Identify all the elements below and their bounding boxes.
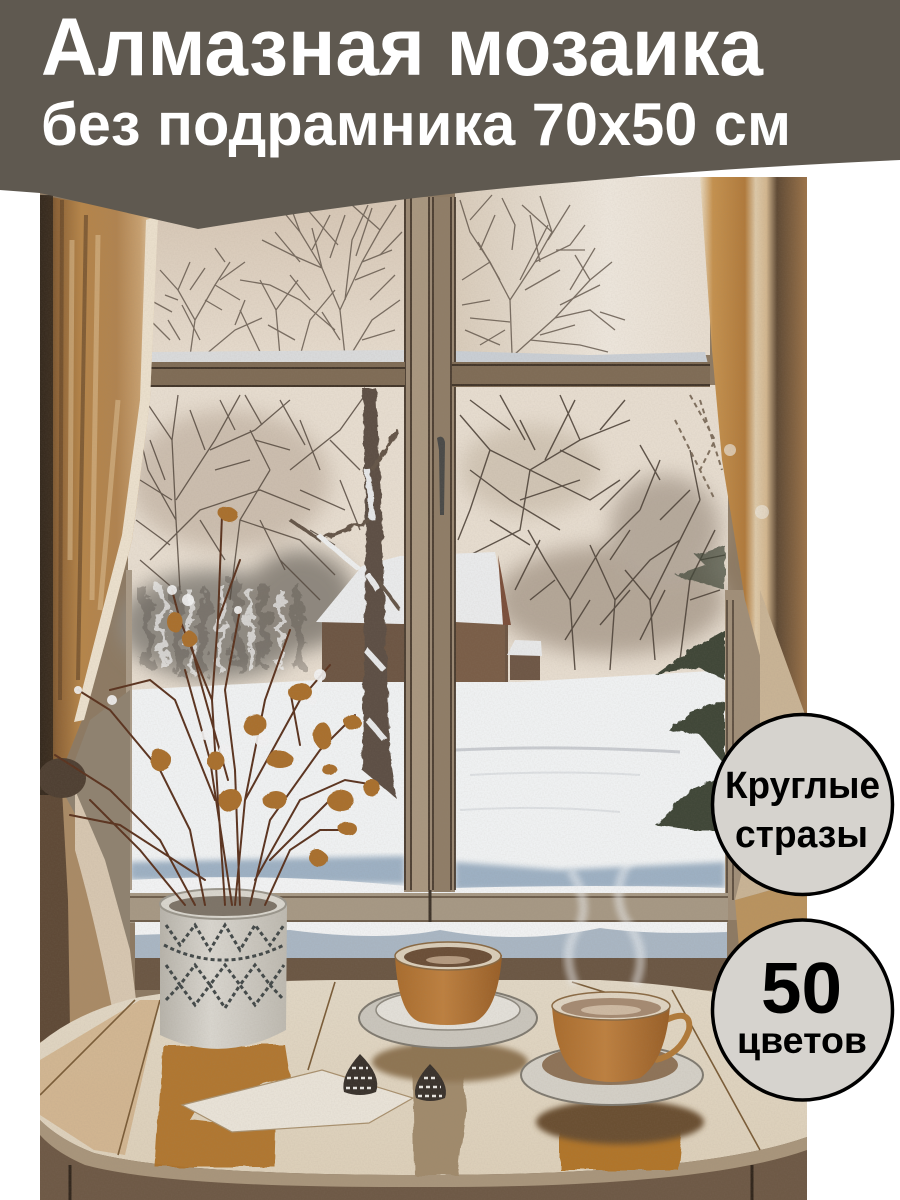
table top — [40, 980, 807, 1175]
panel: upper right window pane — [455, 177, 710, 364]
badge: 50 colours — [712, 920, 892, 1100]
distant tree mass — [120, 410, 725, 680]
header banner — [0, 0, 900, 229]
teacup right with saucer — [521, 992, 703, 1105]
right frame — [725, 590, 760, 920]
badge number: 50 — [761, 949, 842, 1029]
subtitle: без подрамника 70x50 см — [41, 91, 791, 158]
dried leaves — [149, 507, 381, 866]
bare tree branches, right side — [458, 395, 725, 670]
shed — [510, 655, 540, 680]
badge: round rhinestones — [712, 714, 892, 894]
curtain tie — [38, 758, 86, 798]
panel: wooden table — [40, 980, 807, 1200]
steam — [569, 860, 641, 985]
pine cones — [343, 1054, 446, 1101]
horizontal bar left — [148, 362, 405, 387]
wall patch below curtain — [66, 690, 130, 948]
house walls — [322, 620, 508, 682]
badge text line 2: стразы — [735, 814, 868, 856]
wall and window frame base — [40, 193, 770, 1130]
badge text line 1: Круглые — [725, 765, 880, 807]
house roof — [316, 552, 511, 625]
title: Алмазная мозаика — [41, 2, 764, 93]
left frame — [126, 570, 132, 890]
vase — [160, 889, 287, 1049]
paper note — [182, 1070, 413, 1132]
snowy ground — [128, 670, 728, 895]
saucer — [359, 988, 537, 1048]
vase with branches — [55, 507, 381, 1049]
evergreen tree — [655, 545, 725, 830]
panel: window sill with snow — [130, 890, 728, 990]
snowy branches top right — [675, 395, 722, 500]
cup body — [552, 1006, 670, 1082]
teacup left with saucer — [359, 942, 537, 1048]
blue snow shadow band — [130, 856, 725, 890]
table reflections — [155, 1045, 290, 1167]
evergreen snow texture — [145, 580, 300, 675]
branches — [55, 515, 375, 905]
watercolor painting: winter window — [38, 177, 807, 1200]
table edge — [40, 1120, 807, 1187]
panel: left curtain — [38, 195, 158, 1042]
panel: window frame bars — [126, 197, 760, 920]
plank lines — [40, 982, 760, 1155]
panel: right curtain — [700, 177, 807, 1010]
paint grain overlay — [40, 177, 807, 1200]
house — [316, 552, 542, 682]
birch trunk — [290, 388, 400, 798]
cup body — [395, 955, 502, 1025]
horizontal bar right — [452, 362, 710, 387]
left plank tint — [40, 1000, 160, 1155]
handle — [655, 1016, 689, 1060]
badge label: цветов — [737, 1020, 867, 1061]
window handle — [437, 437, 445, 515]
central mullion — [404, 197, 455, 892]
panel: upper left window pane — [152, 199, 404, 362]
bare tree branches, left side — [136, 395, 365, 600]
saucer — [521, 1045, 703, 1105]
snow on branches — [74, 585, 326, 756]
panel: lower window pane with winter landscape — [120, 385, 728, 895]
